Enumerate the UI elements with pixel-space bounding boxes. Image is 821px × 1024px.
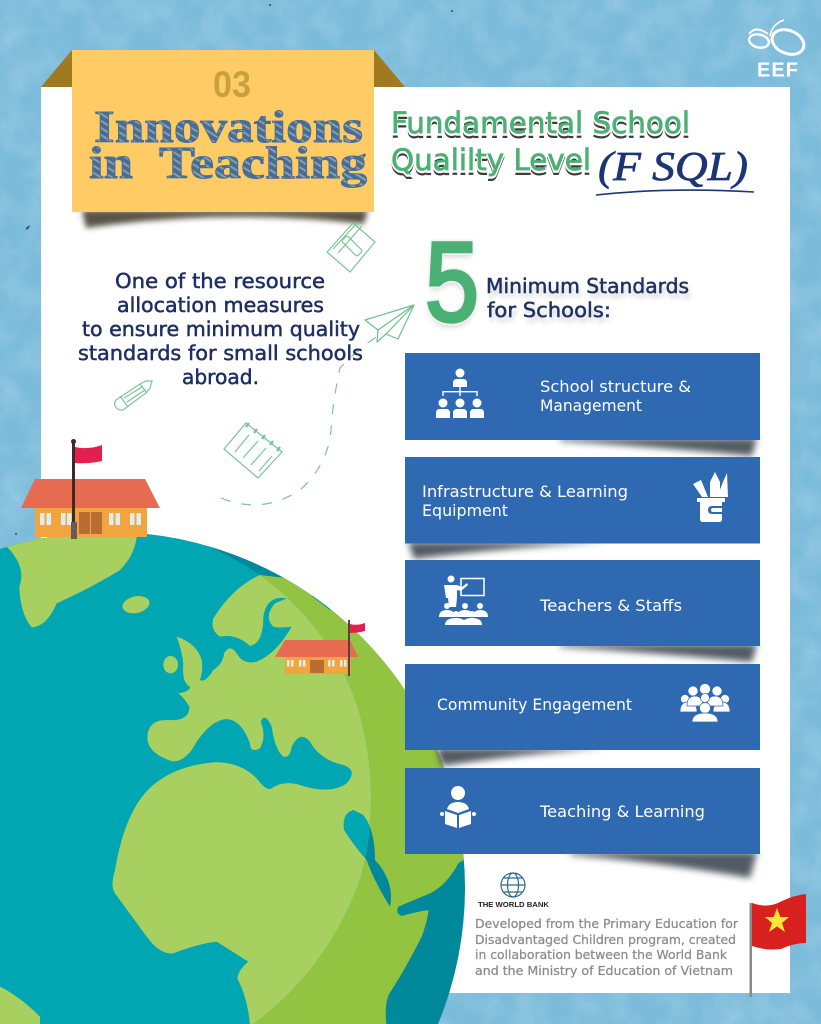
banner heading: in (89, 138, 133, 188)
heading: Fundamental School Quality Level: Fundamental School (391, 110, 690, 144)
illustration: large school with flag (21, 439, 160, 539)
doodle: paper plane (365, 305, 414, 342)
card label: Teachers & Staffs (539, 596, 682, 615)
card: Community Engagement (405, 664, 760, 750)
icon: organisation chart (436, 368, 484, 418)
doodle: notepad (224, 423, 282, 478)
text block: description: One of the resource (115, 269, 325, 293)
text block: source note: in collaboration between the World Bank (475, 948, 727, 962)
icon: Vietnam flag (750, 894, 806, 997)
text block: source note: Disadvantaged Children program, created (475, 933, 736, 947)
text block: source note (475, 917, 738, 978)
shadows under standards cards (408, 438, 757, 878)
logo: EEF (748, 20, 808, 82)
card label: Community Engagement (437, 695, 632, 714)
heading: Fundamental School Quality Level: Qualilty Level (391, 144, 591, 178)
icon: group of people (680, 684, 730, 722)
card label (540, 377, 691, 415)
heading: Minimum Standards for Schools: Minimum Standards (488, 279, 691, 303)
icon: pencil cup (693, 472, 728, 522)
card: Teachers and Staffs (405, 560, 760, 646)
text block: description: to ensure minimum quality (82, 317, 360, 341)
banner heading (89, 102, 368, 188)
illustration: globe (0, 534, 465, 1024)
heading: Fundamental School Quality Level (391, 106, 690, 181)
banner: yellow sticky note with folds and shadow (41, 50, 405, 228)
text block: source note: and the Ministry of Education of Vietnam (475, 964, 733, 978)
heading: FSQL abbreviation: (F SQL) (598, 143, 748, 189)
heading: Minimum Standards for Schools: for Schools: (489, 303, 613, 327)
text block: description: allocation measures (117, 293, 324, 317)
heading: Minimum Standards for Schools (486, 274, 691, 327)
doodle: pencil (115, 381, 152, 410)
text block: description (78, 269, 363, 389)
card label: Teaching & Learning (539, 802, 705, 821)
big number 5: 5 (425, 219, 479, 345)
heading: Minimum Standards for Schools: Minimum Standards (486, 274, 689, 298)
card label: Infrastructure & Learning (422, 482, 628, 501)
big number 5: 5 (425, 219, 479, 345)
heading: Fundamental School Quality Level: Qualilty Level (391, 143, 591, 177)
banner heading: Innovations (94, 102, 363, 152)
arrow: dashed flight path (221, 335, 380, 505)
heading: Fundamental School Quality Level: Qualilty Level (391, 147, 591, 181)
card label: School structure & (540, 377, 691, 396)
section number: 03 (213, 64, 251, 105)
heading: Fundamental School Quality Level: Fundamental School (391, 108, 690, 142)
card: School structure and Management (405, 353, 760, 440)
icon: person reading (440, 786, 476, 828)
logo: The World Bank: THE WORLD BANK (478, 900, 550, 909)
card label: Equipment (422, 501, 508, 520)
card label: Management (540, 396, 642, 415)
doodle: book (327, 222, 375, 272)
banner heading: Teaching (159, 138, 368, 188)
heading: Fundamental School Quality Level: Fundamental School (391, 106, 690, 140)
card: Infrastructure and Learning Equipment (405, 457, 760, 544)
heading: Minimum Standards for Schools: for Schools: (487, 298, 611, 322)
card: Teaching and Learning (405, 768, 760, 854)
logo: The World Bank (478, 873, 550, 909)
text block: description: abroad. (182, 365, 259, 389)
icon: teacher with class (439, 576, 488, 625)
card label (422, 482, 628, 520)
illustration: small school with flag (275, 620, 365, 676)
text block: description: standards for small schools (78, 341, 363, 365)
big number 5: 5 (425, 224, 479, 350)
text block: source note: Developed from the Primary Education for (475, 917, 738, 931)
logo: EEF: EEF (757, 60, 798, 82)
